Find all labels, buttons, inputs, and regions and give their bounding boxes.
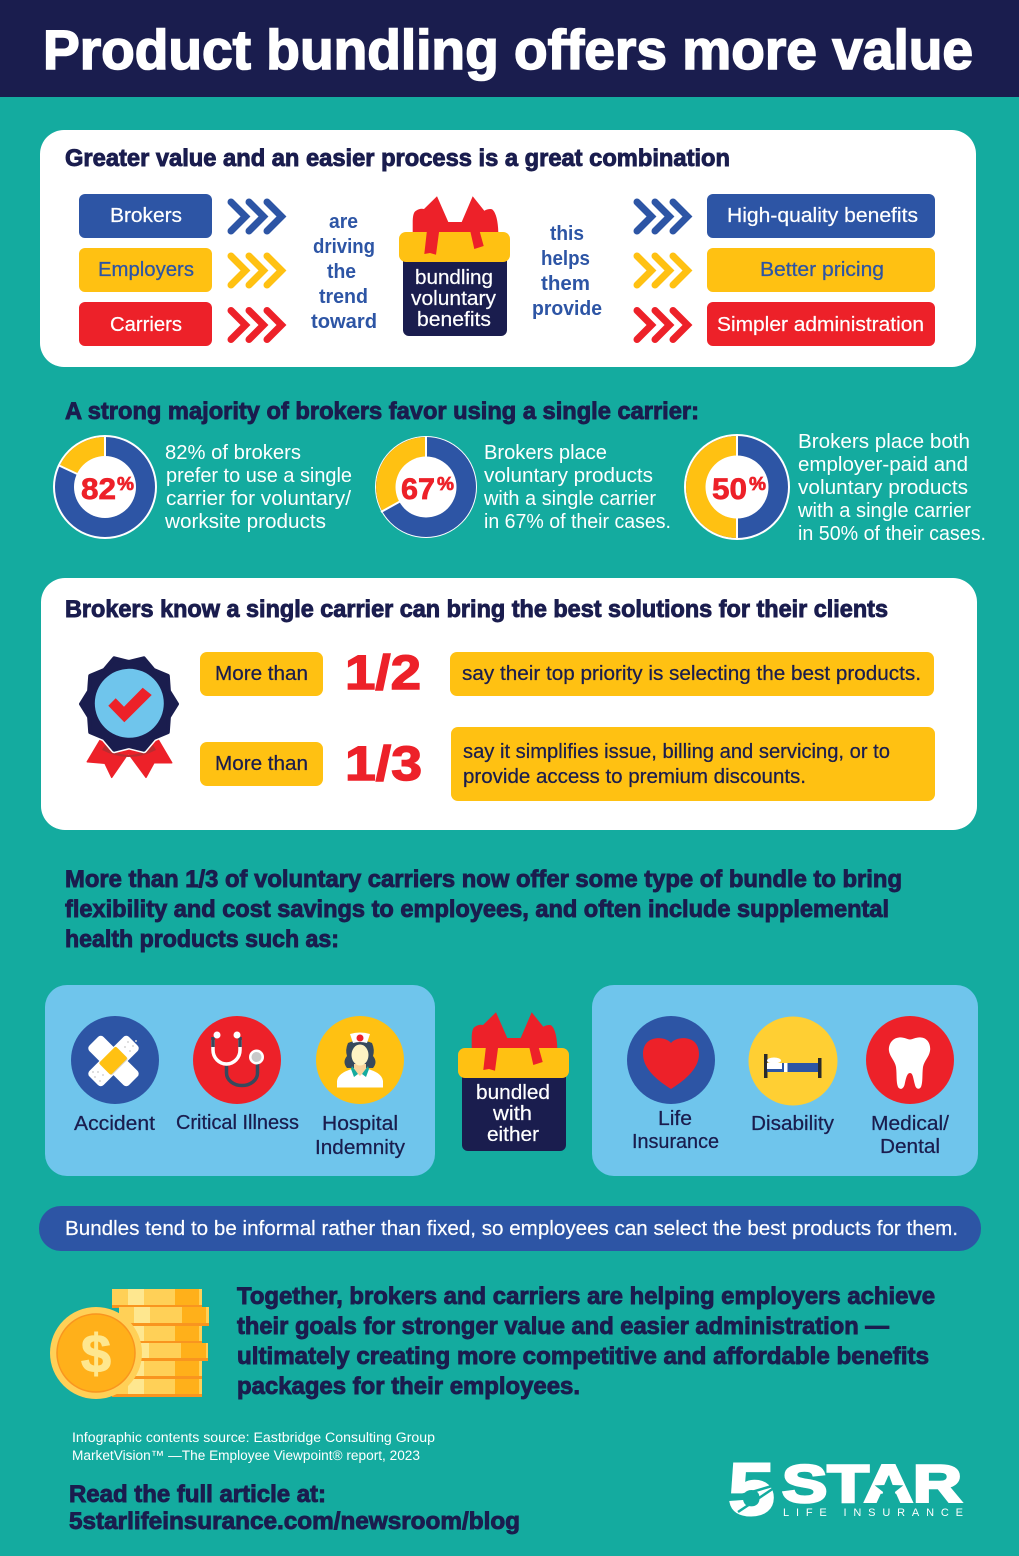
callout: simplifies issue: provide access to premium discounts. (463, 766, 806, 788)
chart: 50 percent donut: % (749, 474, 766, 494)
icon: award badge (81, 658, 177, 777)
heading: brokers know: Brokers know a single carrier can bring the best solutions for their clients (65, 596, 888, 623)
pill: more than one half: More than (215, 663, 308, 685)
arrow: blue chevrons left (231, 202, 282, 231)
arrow: yellow chevrons right (637, 256, 688, 285)
panel: best solutions (41, 578, 977, 830)
banner: bundles informal: Bundles tend to be informal rather than fixed, so employees can select the best products for them. (65, 1218, 958, 1240)
text: this helps them provide: this (550, 223, 584, 245)
text: 82 percent description: carrier for voluntary/ (166, 488, 351, 510)
icon: hospital indemnity nurse (316, 1016, 404, 1104)
pill: better pricing: Better pricing (760, 259, 884, 281)
pill: simpler administration (707, 302, 935, 346)
chart: 82 percent donut: 82 (81, 473, 116, 506)
callout: simplifies issue (451, 727, 935, 801)
text: this helps them provide: provide (532, 298, 602, 320)
panel: right products (592, 985, 978, 1176)
icon: life insurance heart (627, 1016, 715, 1104)
text: 82 percent description: 82% of brokers (165, 442, 301, 464)
text: read the full article: 5starlifeinsurance.com/newsroom/blog (69, 1508, 520, 1535)
pill: employers: Employers (98, 259, 194, 281)
label: hospital indemnity (315, 1113, 405, 1159)
text: source note: Infographic contents source: Eastbridge Consulting Group (72, 1430, 435, 1445)
icon: coin stack (50, 1289, 209, 1399)
text: this helps them provide (532, 223, 602, 320)
pill: employers (79, 248, 212, 292)
icon: gift box bundled with either: with (492, 1103, 532, 1125)
label: hospital indemnity: Indemnity (315, 1137, 405, 1159)
logo: 5 star life insurance: LIFE INSURANCE (783, 1507, 963, 1519)
text block: carriers offer bundles: health products such as: (65, 926, 339, 953)
text block: together brokers and carriers: ultimately creating more competitive and affordable benefits (237, 1343, 929, 1370)
label: disability: Disability (751, 1113, 834, 1135)
pill: more than one third: More than (215, 753, 308, 775)
text: 50 percent description: voluntary products (798, 477, 968, 499)
text: 82 percent description: prefer to use a single (166, 465, 352, 487)
heading: strong majority: A strong majority of brokers favor using a single carrier: (65, 398, 699, 425)
icon: disability bed (748, 1016, 838, 1106)
label: critical illness: Critical Illness (176, 1112, 299, 1134)
icon: gift box bundling voluntary benefits (399, 196, 510, 336)
pill: brokers: Brokers (110, 205, 182, 227)
text: are driving the trend toward: toward (311, 311, 377, 333)
text: read the full article: Read the full article at: (69, 1481, 326, 1508)
icon: coin stack: $ (81, 1324, 111, 1384)
text: 82 percent description (164, 442, 352, 533)
text: are driving the trend toward: trend (319, 286, 368, 308)
chart: 67 percent donut: 67 (401, 473, 435, 506)
text: this helps them provide: them (541, 273, 590, 295)
callout: top priority (450, 652, 934, 696)
chart: 50 percent donut: 50 (712, 473, 747, 506)
banner: bundles informal (39, 1206, 981, 1251)
logo: 5 star life insurance: 5 (728, 1448, 775, 1531)
text: source note (72, 1430, 435, 1463)
pill: carriers (79, 302, 212, 346)
arrow: red chevrons right (637, 310, 688, 340)
label: medical dental (871, 1113, 949, 1158)
label: life insurance: Life (658, 1108, 692, 1130)
icon: gift box bundling voluntary benefits: voluntary (411, 288, 496, 310)
text block: together brokers and carriers (237, 1283, 935, 1400)
text: 50 percent description: in 50% of their cases. (798, 523, 986, 545)
text block: carriers offer bundles: flexibility and cost savings to employees, and often include supplemental (65, 896, 889, 923)
label: life insurance: Insurance (632, 1131, 719, 1153)
text: 50 percent description: Brokers place both (798, 431, 970, 453)
text: are driving the trend toward: the (327, 261, 356, 283)
pill: more than one half (200, 652, 323, 696)
pill: better pricing (707, 248, 935, 292)
chart: 50 percent donut (684, 434, 790, 540)
callout: top priority: say their top priority is selecting the best products. (462, 663, 921, 685)
callout: simplifies issue: say it simplifies issue, billing and servicing, or to (463, 741, 890, 763)
header banner (0, 0, 1019, 97)
pill: carriers: Carriers (110, 314, 182, 336)
text block: together brokers and carriers: their goals for stronger value and easier administration — (237, 1313, 889, 1340)
label: life insurance (632, 1108, 719, 1153)
icon: gift box bundled with either (458, 1012, 569, 1151)
pill: high-quality benefits (707, 194, 935, 238)
panel: value and easier process (40, 130, 976, 367)
text: 50 percent description: with a single carrier (797, 500, 971, 522)
pill: brokers (79, 194, 212, 238)
text: 67 percent description: in 67% of their cases. (484, 511, 671, 533)
text: 67 percent description: Brokers place (484, 442, 607, 464)
text: 50 percent description: employer-paid and (798, 454, 968, 476)
text: 67 percent description: voluntary products (484, 465, 653, 487)
stat: 1/2: 1/2 (345, 647, 421, 700)
text: read the full article (69, 1481, 520, 1535)
text: are driving the trend toward: driving (313, 236, 375, 258)
label: accident: Accident (74, 1113, 155, 1135)
chart: 67 percent donut: % (437, 474, 454, 494)
text: 67 percent description: with a single carrier (483, 488, 656, 510)
heading: greater value: Greater value and an easier process is a great combination (65, 145, 730, 172)
text: 50 percent description (797, 431, 986, 545)
pill: simpler administration: Simpler administration (717, 314, 924, 336)
label: medical dental: Medical/ (871, 1113, 949, 1135)
icon: medical dental tooth (866, 1016, 954, 1104)
text: 67 percent description (483, 442, 671, 533)
text block: carriers offer bundles: More than 1/3 of voluntary carriers now offer some type of bundle to bring (65, 866, 902, 893)
icon: gift box bundling voluntary benefits: bundling (415, 267, 493, 289)
text: source note: MarketVision™ —The Employee Viewpoint® report, 2023 (72, 1448, 420, 1463)
text: are driving the trend toward (311, 211, 377, 333)
chart: 82 percent donut: % (117, 474, 134, 494)
text block: together brokers and carriers: Together, brokers and carriers are helping employers achieve (237, 1283, 935, 1310)
stat: 1/3: 1/3 (345, 738, 422, 791)
chart: 82 percent donut (53, 435, 157, 539)
text: are driving the trend toward: are (329, 211, 358, 233)
arrow: yellow chevrons left (231, 256, 282, 285)
icon: gift box bundled with either: bundled (476, 1082, 550, 1104)
panel: left products (45, 985, 435, 1176)
text: 82 percent description: worksite products (164, 511, 326, 533)
pill: more than one third (200, 742, 323, 786)
title: Product bundling offers more value (43, 18, 973, 81)
text: this helps them provide: helps (541, 248, 590, 270)
chart: 67 percent donut (375, 436, 477, 538)
text block: together brokers and carriers: packages for their employees. (237, 1373, 580, 1400)
arrow: blue chevrons right (637, 202, 688, 231)
pill: high-quality benefits: High-quality benefits (727, 205, 918, 227)
icon: gift box bundling voluntary benefits: benefits (417, 309, 491, 331)
arrow: red chevrons left (231, 310, 282, 340)
text block: carriers offer bundles (65, 866, 902, 953)
label: hospital indemnity: Hospital (322, 1113, 398, 1135)
logo: 5 star life insurance: STAR (782, 1455, 962, 1514)
icon: gift box bundled with either: either (487, 1124, 539, 1146)
label: medical dental: Dental (880, 1136, 940, 1158)
icon: critical illness stethoscope (193, 1016, 281, 1104)
logo: 5 star life insurance (728, 1448, 963, 1531)
icon: accident bandage (71, 1016, 159, 1104)
